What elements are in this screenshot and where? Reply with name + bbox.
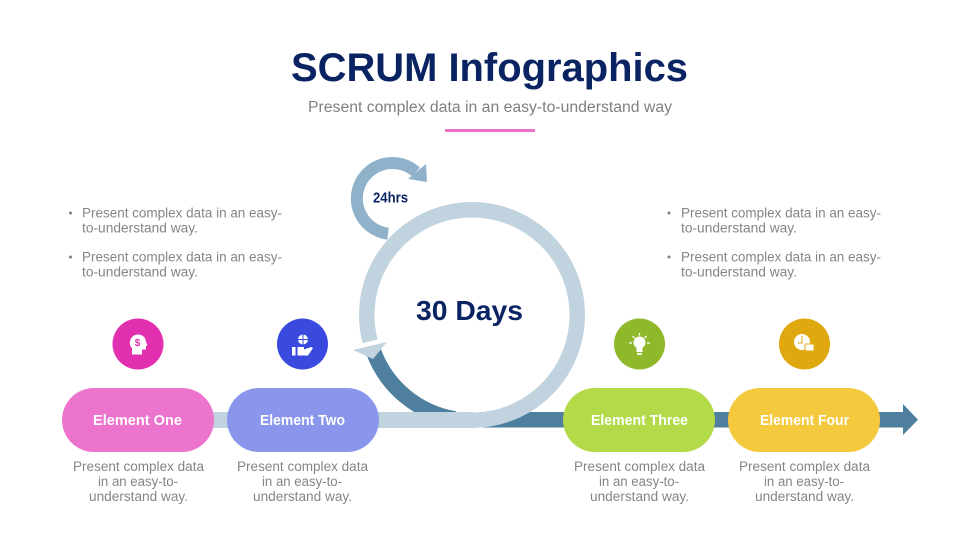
text block: element two description: in an easy-to- bbox=[262, 474, 342, 489]
text block: right bullets: Present complex data in an easy- bbox=[681, 206, 881, 220]
text block: element three description: Present complex data bbox=[574, 459, 705, 474]
title: SCRUM Infographics bbox=[291, 46, 688, 90]
text block: left bullets: Present complex data in an easy- bbox=[82, 206, 282, 220]
panel: element two bbox=[227, 388, 379, 452]
panel: element one: Element One bbox=[93, 412, 182, 429]
subtitle: Present complex data in an easy-to-understand way bbox=[308, 99, 672, 116]
text block: element three description: understand way. bbox=[590, 489, 689, 504]
panel: element two: Element Two bbox=[260, 412, 345, 429]
text block: right bullets: to-understand way. bbox=[681, 264, 797, 280]
text block: element four description: in an easy-to- bbox=[764, 474, 844, 489]
arrow: 30 day cycle ring and light bar bbox=[210, 210, 577, 428]
arrow: timeline dark bar bbox=[480, 404, 918, 435]
title underline bbox=[445, 129, 535, 132]
text block: element one description: understand way. bbox=[89, 489, 188, 504]
text block: element four description: understand way. bbox=[755, 489, 854, 504]
arrow: dark arc into 30 day cycle bbox=[374, 352, 455, 419]
label: 30 Days: 30 Days bbox=[416, 295, 523, 326]
text block: right bullets: to-understand way. bbox=[681, 220, 797, 236]
icon: clock with speech note bbox=[779, 318, 830, 370]
panel: element four bbox=[728, 388, 880, 452]
text block: right bullets bbox=[668, 206, 881, 280]
text block: element three description bbox=[574, 459, 705, 504]
text block: element two description: Present complex data bbox=[237, 459, 368, 474]
text block: left bullets: to-understand way. bbox=[82, 264, 198, 280]
text block: element two description: understand way. bbox=[253, 489, 352, 504]
label: 24hrs: 24hrs bbox=[373, 190, 408, 206]
panel: element four: Element Four bbox=[760, 412, 849, 429]
panel: element three: Element Three bbox=[591, 412, 688, 429]
icon: head with dollar bbox=[112, 318, 164, 370]
panel: element one bbox=[62, 388, 214, 452]
text block: left bullets: to-understand way. bbox=[82, 220, 198, 236]
icon: head with dollar: $ bbox=[135, 338, 141, 349]
text block: element one description: in an easy-to- bbox=[98, 474, 178, 489]
text block: element two description bbox=[237, 459, 368, 504]
icon: light bulb bbox=[614, 318, 665, 370]
text block: right bullets: Present complex data in an easy- bbox=[681, 250, 881, 264]
arrow: 24 hour loop bbox=[357, 163, 427, 234]
text block: left bullets: Present complex data in an easy- bbox=[82, 250, 282, 264]
icon: hand holding globe bbox=[277, 318, 328, 370]
text block: element one description bbox=[73, 459, 204, 504]
text block: element three description: in an easy-to- bbox=[599, 474, 679, 489]
text block: element one description: Present complex data bbox=[73, 459, 204, 474]
panel: element three bbox=[563, 388, 715, 452]
text block: left bullets bbox=[69, 206, 282, 280]
text block: element four description: Present complex data bbox=[739, 459, 870, 474]
text block: element four description bbox=[739, 459, 870, 504]
